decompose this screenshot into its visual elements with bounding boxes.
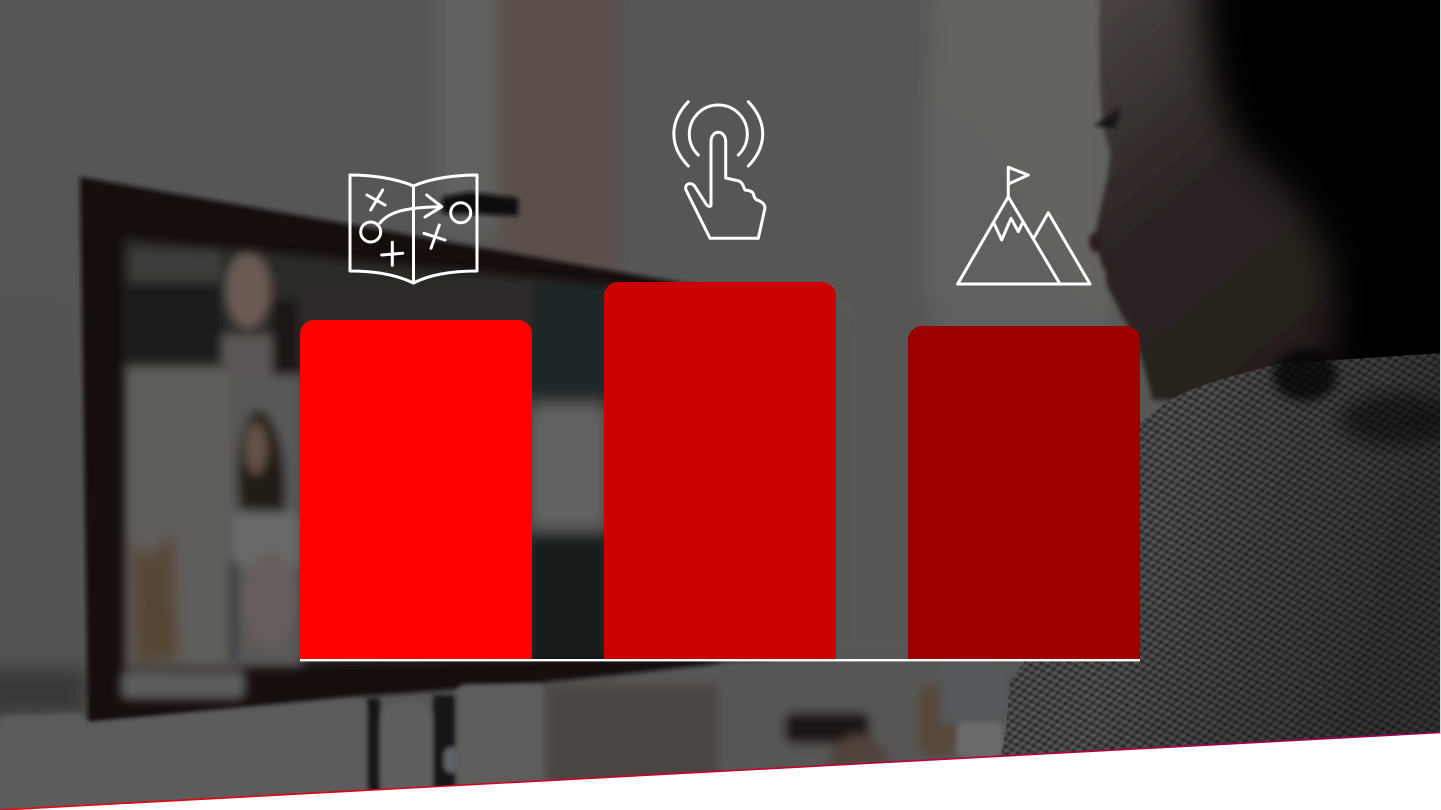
monitor screen tiles [120, 238, 760, 700]
chart baseline [300, 659, 1140, 661]
icon: strategy map [350, 175, 477, 283]
tile between bars [526, 402, 610, 532]
person: hair [1200, 0, 1441, 420]
bar 2 [604, 282, 836, 659]
icon: mountain with flag [958, 167, 1090, 284]
bar 1 [300, 320, 532, 659]
person: eyelash and lips shadow [1089, 107, 1120, 252]
webcam on monitor [442, 192, 518, 216]
bar 3 [908, 326, 1140, 659]
monitor frame [80, 177, 770, 723]
desk items right of centre [546, 662, 1002, 784]
desk and foreground objects [0, 684, 546, 810]
desk white object [957, 722, 1003, 758]
person: face and neck [1096, 0, 1441, 400]
person: knit sweater [1000, 349, 1441, 760]
icon: touch gesture hand [674, 102, 765, 238]
